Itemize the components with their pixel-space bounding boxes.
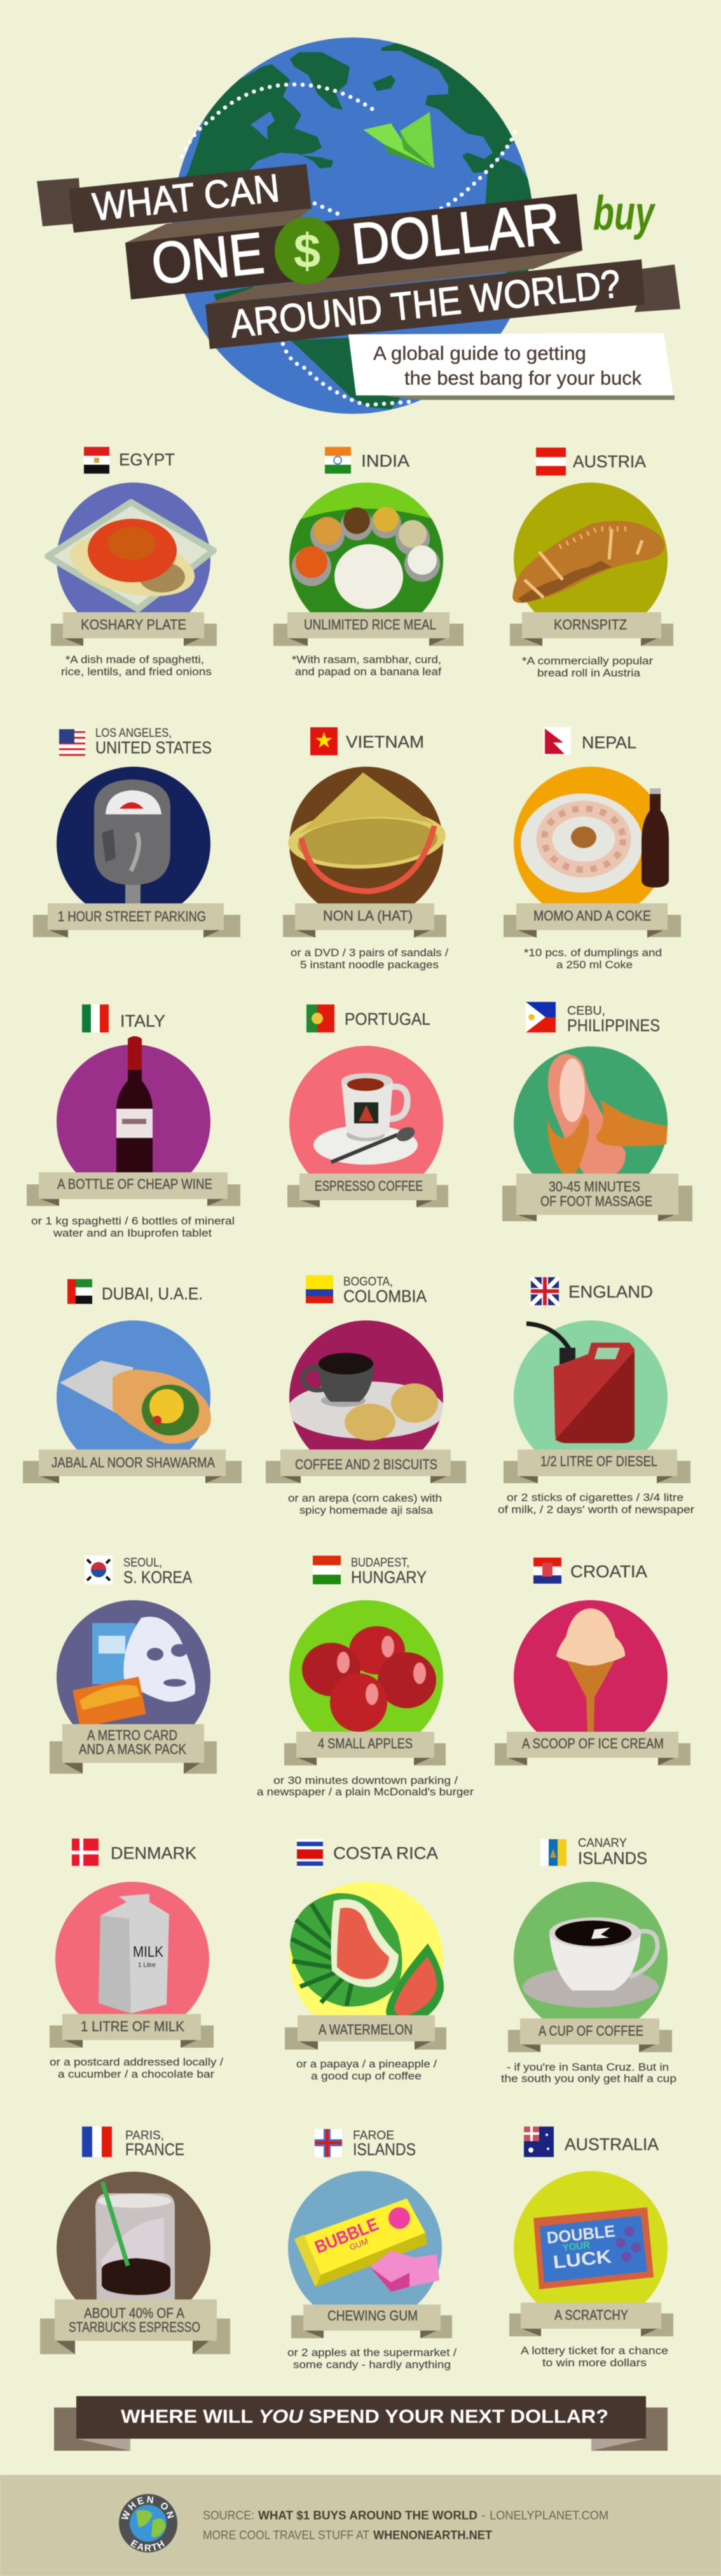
note: A lottery ticket for a chance <box>521 2345 668 2357</box>
source line: SOURCE: <box>203 2509 254 2523</box>
note: *A commercially popular <box>522 655 653 667</box>
country label: ITALY <box>120 1011 165 1031</box>
country label: PARIS, <box>125 2129 164 2142</box>
country label: VIETNAM <box>346 732 424 751</box>
country label <box>343 1275 427 1306</box>
note: - if you're in Santa Cruz. But in <box>507 2061 669 2073</box>
flag: Australia <box>524 2127 554 2157</box>
note: water and an Ibuprofen tablet <box>53 1227 212 1239</box>
illustration: rice meal <box>289 482 444 613</box>
note: *10 pcs. of dumplings and <box>524 947 662 959</box>
ribbon: JABAL AL NOOR SHAWARMA <box>52 1455 215 1470</box>
source line: - <box>481 2509 485 2523</box>
flag: Hungary <box>313 1556 341 1584</box>
flag: Canary Islands <box>540 1839 566 1866</box>
country label: CANARY <box>578 1837 627 1850</box>
note: some candy - hardly anything <box>293 2359 451 2371</box>
ribbon <box>285 2015 446 2050</box>
card: India <box>273 447 464 678</box>
illustration: kornspitz <box>512 483 668 636</box>
illustration: ice cream <box>514 1600 668 1754</box>
illustration: conical hat <box>287 767 447 921</box>
flag: Denmark <box>72 1839 99 1866</box>
note: or a papaya / a pineapple / <box>296 2058 437 2070</box>
ribbon <box>266 1449 466 1483</box>
illustration: parking meter <box>57 767 210 921</box>
ribbon: KOSHARY PLATE <box>81 617 186 633</box>
ribbon <box>33 903 240 938</box>
illustration: milk carton: MILK <box>133 1943 163 1961</box>
flag: Portugal <box>306 1004 334 1032</box>
country label: DENMARK <box>111 1844 196 1863</box>
country label: COSTA RICA <box>333 1844 438 1863</box>
ribbon <box>509 2303 673 2336</box>
illustration: bubble gum: GUM <box>348 2237 369 2252</box>
card: Nepal <box>504 727 681 971</box>
card: Colombia <box>266 1275 466 1516</box>
note: or 1 kg spaghetti / 6 bottles of mineral <box>31 1215 235 1227</box>
website line: MORE COOL TRAVEL STUFF AT <box>203 2529 369 2542</box>
illustration: cup of coffee <box>514 1882 668 2036</box>
country label: ISLANDS <box>578 1849 647 1868</box>
country label: FAROE <box>353 2129 394 2142</box>
card: France <box>40 2127 230 2354</box>
country label: AUSTRIA <box>573 452 646 471</box>
globe <box>172 37 532 414</box>
country label: CEBU, <box>567 1004 605 1018</box>
flag: Vietnam: ★ <box>314 729 334 753</box>
illustration: starbucks espresso <box>57 2172 210 2326</box>
illustration: bubble gum: BUBBLE <box>312 2214 381 2257</box>
country label: PHILIPPINES <box>567 1016 660 1035</box>
note: or a DVD / 3 pairs of sandals / <box>291 947 448 959</box>
word: buy: buy <box>593 186 656 240</box>
note <box>296 2058 437 2082</box>
ribbon: STARBUCKS ESPRESSO <box>69 2319 200 2335</box>
note: *A dish made of spaghetti, <box>65 654 204 666</box>
icon: dollar coin <box>275 217 340 284</box>
country label: BUDAPEST, <box>351 1556 409 1570</box>
ribbon <box>510 612 673 646</box>
note <box>501 2061 676 2085</box>
note: bread roll in Austria <box>537 667 641 679</box>
card: Canary Islands <box>501 1837 676 2085</box>
note: and papad on a banana leaf <box>295 666 441 678</box>
ribbon: NON LA (HAT) <box>323 908 413 924</box>
card: Philippines <box>502 1002 692 1221</box>
flag: USA <box>59 729 85 756</box>
ribbon <box>504 1449 690 1483</box>
illustration: wine bottle <box>57 1036 210 1198</box>
illustration: jerry can <box>514 1320 668 1474</box>
illustration: apples <box>289 1600 443 1754</box>
note <box>521 2345 668 2369</box>
ribbon <box>50 2014 214 2048</box>
ribbon: COFFEE AND 2 BISCUITS <box>295 1456 437 1472</box>
icon: dollar coin: $ <box>294 224 320 278</box>
note: or 30 minutes downtown parking / <box>273 1774 458 1786</box>
flag: South Korea <box>85 1556 113 1584</box>
country label: HUNGARY <box>351 1568 427 1587</box>
ribbon tails <box>37 178 680 312</box>
country label: FRANCE <box>125 2140 184 2159</box>
note <box>31 1215 235 1239</box>
country label: INDIA <box>361 451 409 470</box>
closing banner: WHERE WILL YOU SPEND YOUR NEXT DOLLAR? <box>121 2406 608 2427</box>
note: the south you only get half a cup <box>501 2072 676 2085</box>
website line <box>203 2529 492 2542</box>
note: 5 instant noodle packages <box>300 959 439 971</box>
ribbon <box>40 2299 230 2354</box>
illustration: momo and coke <box>514 767 669 921</box>
country label <box>123 1556 192 1587</box>
country label: UNITED STATES <box>95 738 212 757</box>
card: Dubai <box>23 1279 242 1483</box>
note: or an arepa (corn cakes) with <box>288 1492 442 1504</box>
note <box>524 947 662 971</box>
banner: one dollar <box>125 191 582 299</box>
closing banner <box>54 2396 668 2451</box>
note <box>522 655 653 679</box>
card: Italy <box>27 1004 240 1239</box>
country label: NEPAL <box>582 733 636 752</box>
ribbon: ABOUT 40% OF A <box>84 2305 184 2321</box>
illustration: coffee and biscuits <box>289 1320 444 1450</box>
country label: BOGOTA, <box>343 1275 393 1289</box>
card: Costa Rica <box>285 1839 446 2082</box>
country label: EGYPT <box>119 450 175 469</box>
banner: one dollar: DOLLAR <box>348 191 563 277</box>
ribbon: OF FOOT MASSAGE <box>540 1193 652 1209</box>
flag: India <box>325 447 351 474</box>
ribbon: MOMO AND A COKE <box>533 908 651 924</box>
subtitle card: the best bang for your buck <box>404 367 642 389</box>
country label <box>578 1837 647 1868</box>
logo: When On Earth: WHEN ON <box>121 2496 174 2520</box>
card: Australia <box>509 2127 673 2369</box>
note: a 250 ml Coke <box>556 959 633 971</box>
country label: ISLANDS <box>353 2140 416 2159</box>
country label: SEOUL, <box>123 1556 162 1570</box>
ribbon <box>273 612 464 646</box>
country label: S. KOREA <box>123 1568 192 1587</box>
country label <box>353 2129 416 2159</box>
ribbon fold <box>205 250 582 305</box>
ribbon fold <box>125 209 312 243</box>
illustration: bubble gum <box>288 2171 442 2325</box>
illustration: metro card and mask <box>57 1600 210 1754</box>
subtitle card: A global guide to getting <box>373 342 586 364</box>
illustration: foot massage <box>514 1046 668 1200</box>
note <box>61 654 212 678</box>
note: spicy homemade aji salsa <box>299 1504 434 1516</box>
flag: Nepal <box>544 727 571 755</box>
country label <box>567 1004 660 1035</box>
note: rice, lentils, and fried onions <box>61 666 212 678</box>
ribbon: 4 SMALL APPLES <box>318 1736 413 1751</box>
country label: COLOMBIA <box>343 1287 427 1306</box>
illustration: scratch ticket: DOUBLE <box>546 2221 616 2247</box>
illustration: espresso <box>289 1046 443 1200</box>
ribbon: 1/2 LITRE OF DIESEL <box>540 1453 657 1469</box>
note <box>50 2056 223 2080</box>
ribbon: UNLIMITED RICE MEAL <box>304 617 436 633</box>
icon: paper dollar plane <box>363 112 434 168</box>
card: South Korea <box>50 1556 217 1774</box>
flag: Vietnam <box>310 727 338 755</box>
card: England <box>498 1277 694 1516</box>
card: Croatia <box>495 1558 690 1765</box>
card: Austria <box>510 448 673 679</box>
note <box>257 1774 474 1798</box>
ribbon <box>502 1174 692 1221</box>
illustration: scratch ticket: LUCK <box>552 2247 612 2273</box>
flag: Austria <box>536 448 566 476</box>
note: of milk, / 2 days' worth of newspaper <box>498 1504 694 1516</box>
note <box>292 654 441 678</box>
card: Portugal <box>287 1004 448 1207</box>
ribbon <box>27 1172 240 1206</box>
card: Denmark <box>50 1839 223 2080</box>
ribbon: ESPRESSO COFFEE <box>315 1178 423 1194</box>
ribbon <box>284 1732 446 1765</box>
ribbon: A SCRATCHY <box>554 2307 628 2323</box>
ribbon <box>291 2305 452 2338</box>
footer <box>0 2474 721 2576</box>
ribbon: A CUP OF COFFEE <box>539 2023 643 2039</box>
ribbon <box>51 612 217 646</box>
ribbon: 1 LITRE OF MILK <box>81 2018 184 2034</box>
ribbon: CHEWING GUM <box>327 2308 418 2324</box>
card: Faroe Islands <box>287 2129 457 2371</box>
country label: PORTUGAL <box>345 1010 430 1029</box>
illustration: shawarma <box>57 1320 211 1474</box>
source line: LONELYPLANET.COM <box>490 2509 608 2523</box>
ribbon <box>495 1732 690 1765</box>
note: or a postcard addressed locally / <box>50 2056 223 2068</box>
flag: France <box>82 2127 112 2157</box>
flag: UK <box>531 1277 559 1305</box>
ribbon: A BOTTLE OF CHEAP WINE <box>57 1176 212 1192</box>
country label <box>351 1556 427 1587</box>
illustration: milk carton: 1 Litre <box>138 1962 156 1969</box>
country label: ENGLAND <box>568 1282 653 1301</box>
card: Hungary <box>257 1556 474 1798</box>
source line: WHAT $1 BUYS AROUND THE WORLD <box>258 2509 477 2523</box>
banner: around the world: AROUND THE WORLD? <box>228 262 622 346</box>
note: a newspaper / a plain McDonald's burger <box>257 1786 474 1798</box>
note: or 2 apples at the supermarket / <box>287 2346 457 2359</box>
logo: When On Earth <box>118 2493 178 2553</box>
banner: one dollar: ONE <box>148 221 267 297</box>
illustration: koshary plate <box>48 483 214 636</box>
note <box>291 947 448 971</box>
ribbon: A SCOOP OF ICE CREAM <box>522 1736 664 1751</box>
country label <box>125 2129 184 2159</box>
ribbon: AND A MASK PACK <box>79 1741 186 1757</box>
illustration: scratch ticket: YOUR <box>562 2240 591 2254</box>
flag: Croatia <box>533 1558 561 1584</box>
ribbon <box>50 1724 217 1774</box>
ribbon <box>508 2018 672 2052</box>
ribbon: 1 HOUR STREET PARKING <box>58 908 206 924</box>
note: to win more dollars <box>542 2357 647 2369</box>
banner: what can: WHAT CAN <box>90 166 282 230</box>
ribbon: 30-45 MINUTES <box>549 1179 640 1195</box>
note: *With rasam, sambhar, curd, <box>292 654 441 666</box>
country label: AUSTRALIA <box>565 2135 659 2154</box>
note <box>498 1491 694 1516</box>
subtitle card <box>348 333 675 400</box>
country label: CROATIA <box>570 1562 647 1581</box>
flag: Italy <box>82 1004 109 1032</box>
country label: DUBAI, U.A.E. <box>102 1284 203 1303</box>
ribbon <box>287 1174 448 1207</box>
logo: When On Earth: EARTH <box>130 2539 165 2552</box>
note <box>288 1492 442 1516</box>
card: Vietnam <box>283 727 448 971</box>
flag: Faroe Islands <box>315 2129 342 2157</box>
card: Egypt <box>48 447 217 678</box>
ribbon <box>23 1449 242 1483</box>
illustration: scratch ticket <box>514 2171 668 2325</box>
flag: Colombia <box>306 1275 333 1303</box>
ribbon: A WATERMELON <box>319 2022 413 2038</box>
title banner <box>37 164 680 349</box>
card: United States <box>33 727 240 938</box>
ribbon: KORNSPITZ <box>554 617 627 633</box>
ribbon: A METRO CARD <box>87 1727 177 1743</box>
ribbon <box>504 903 681 938</box>
illustration: watermelon <box>289 1882 444 2036</box>
note: or 2 sticks of cigarettes / 3/4 litre <box>507 1491 683 1504</box>
flag: Costa Rica <box>297 1839 323 1868</box>
country label: LOS ANGELES, <box>95 727 172 740</box>
note <box>287 2346 457 2371</box>
note: a good cup of coffee <box>311 2070 422 2082</box>
flag: Egypt <box>84 447 109 474</box>
country label <box>95 727 212 757</box>
source line <box>203 2509 608 2523</box>
note: a cucumber / a chocolate bar <box>58 2068 214 2080</box>
flag: UAE <box>67 1279 92 1304</box>
website line: WHENONEARTH.NET <box>373 2529 492 2542</box>
ribbon <box>283 903 446 938</box>
illustration: milk carton <box>55 1882 209 2036</box>
flag: Philippines <box>526 1002 556 1032</box>
